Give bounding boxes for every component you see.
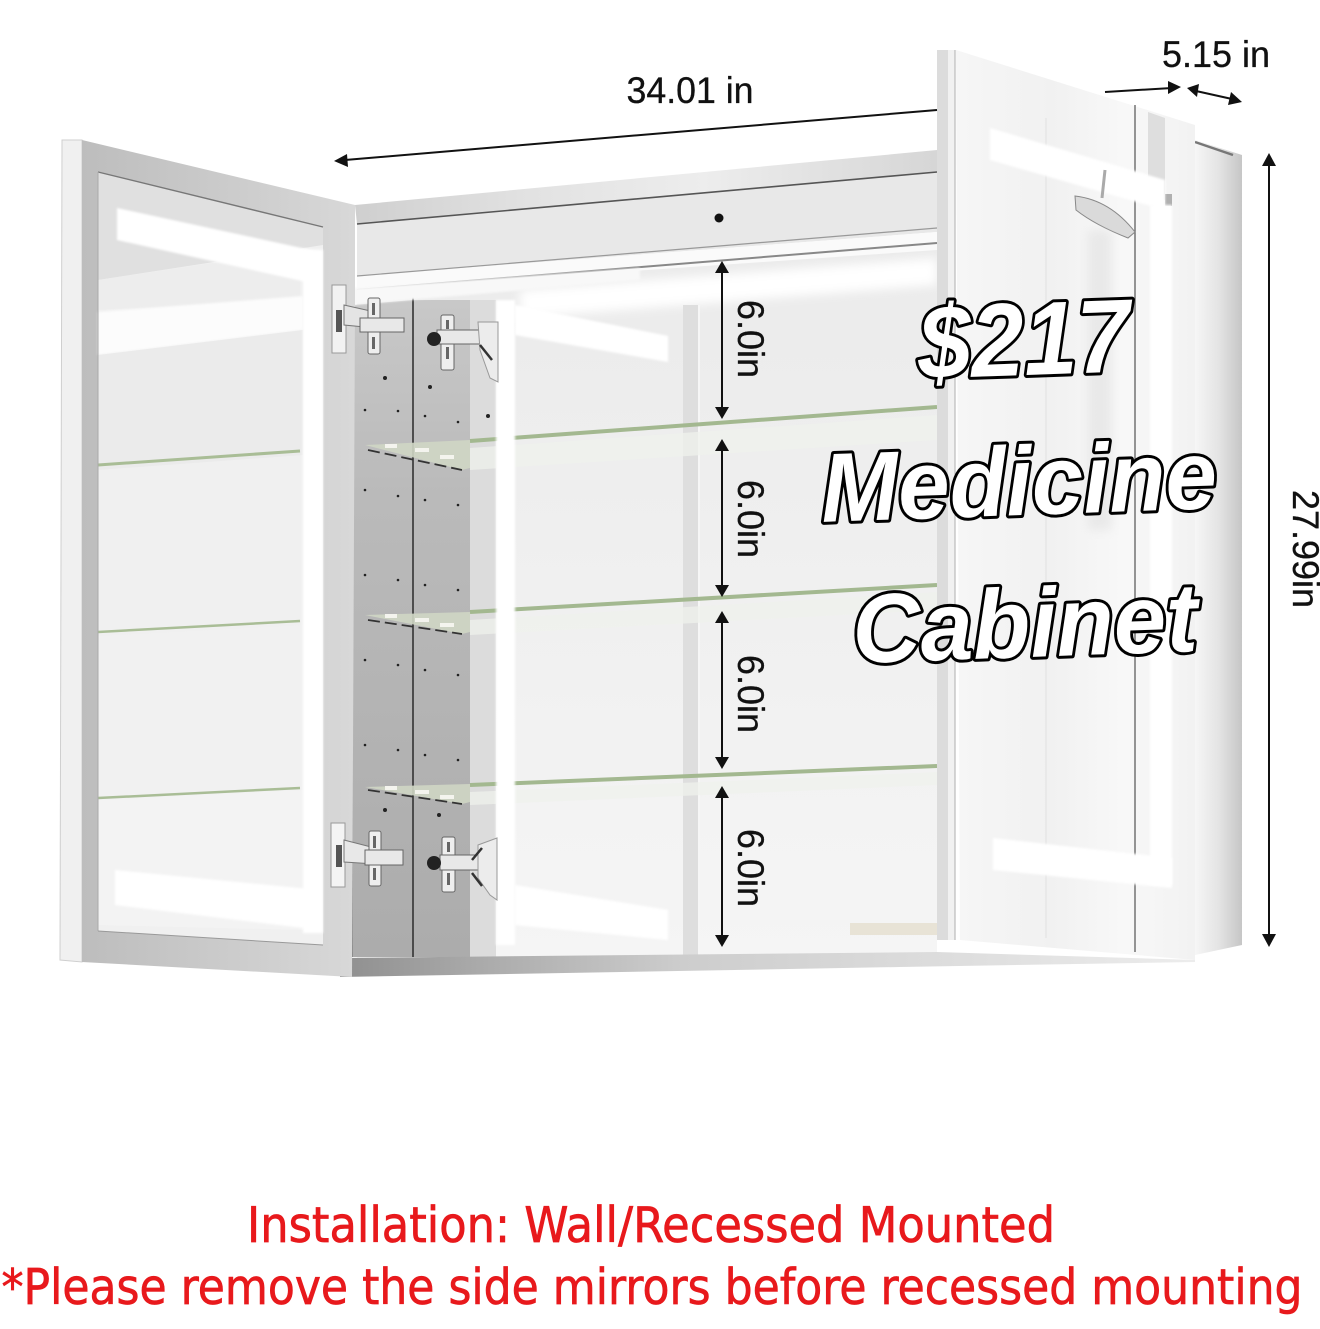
left door [60,140,355,977]
right door [937,50,1195,960]
shelf spacing dimension 3: 6.0in [730,655,771,733]
title: Cabinet: Cabinet [850,562,1202,684]
cabinet back interior [355,150,938,958]
width dimension: 34.01 in [334,70,937,167]
right side panel [1178,140,1242,955]
cabinet illustration [60,50,1242,977]
installation note: Installation: Wall/Recessed Mounted [247,1197,1055,1254]
height dimension: 27.99in [1262,153,1320,947]
title: Medicine: Medicine [819,419,1219,543]
right door LED lights [990,128,1172,888]
shelf spacing dimension 3 [715,611,771,769]
left door LED lights [115,208,323,933]
bottom hinge [331,823,497,900]
depth dimension: 5.15 in: 5.15 in [1162,34,1270,75]
title: price: $217 [915,278,1136,402]
shelf spacing dimension 4 [715,786,771,947]
width dimension: 34.01 in: 34.01 in [626,70,754,111]
reflected LED strip [496,300,668,945]
shelf spacing dimension 1 [715,261,771,419]
shelf spacing dimension 1: 6.0in [730,300,771,378]
shelf spacing dimension 2 [715,439,771,597]
shelf spacing dimension 2: 6.0in [730,480,771,558]
bottom edge [340,952,1195,977]
depth dimension: 5.15 in [1105,34,1270,105]
shelves [365,407,937,805]
side wall hinge panels [352,268,640,957]
top hinge [332,285,498,382]
icon: shower head reflection [1075,170,1135,530]
shelf spacing dimension 4: 6.0in [730,829,771,907]
